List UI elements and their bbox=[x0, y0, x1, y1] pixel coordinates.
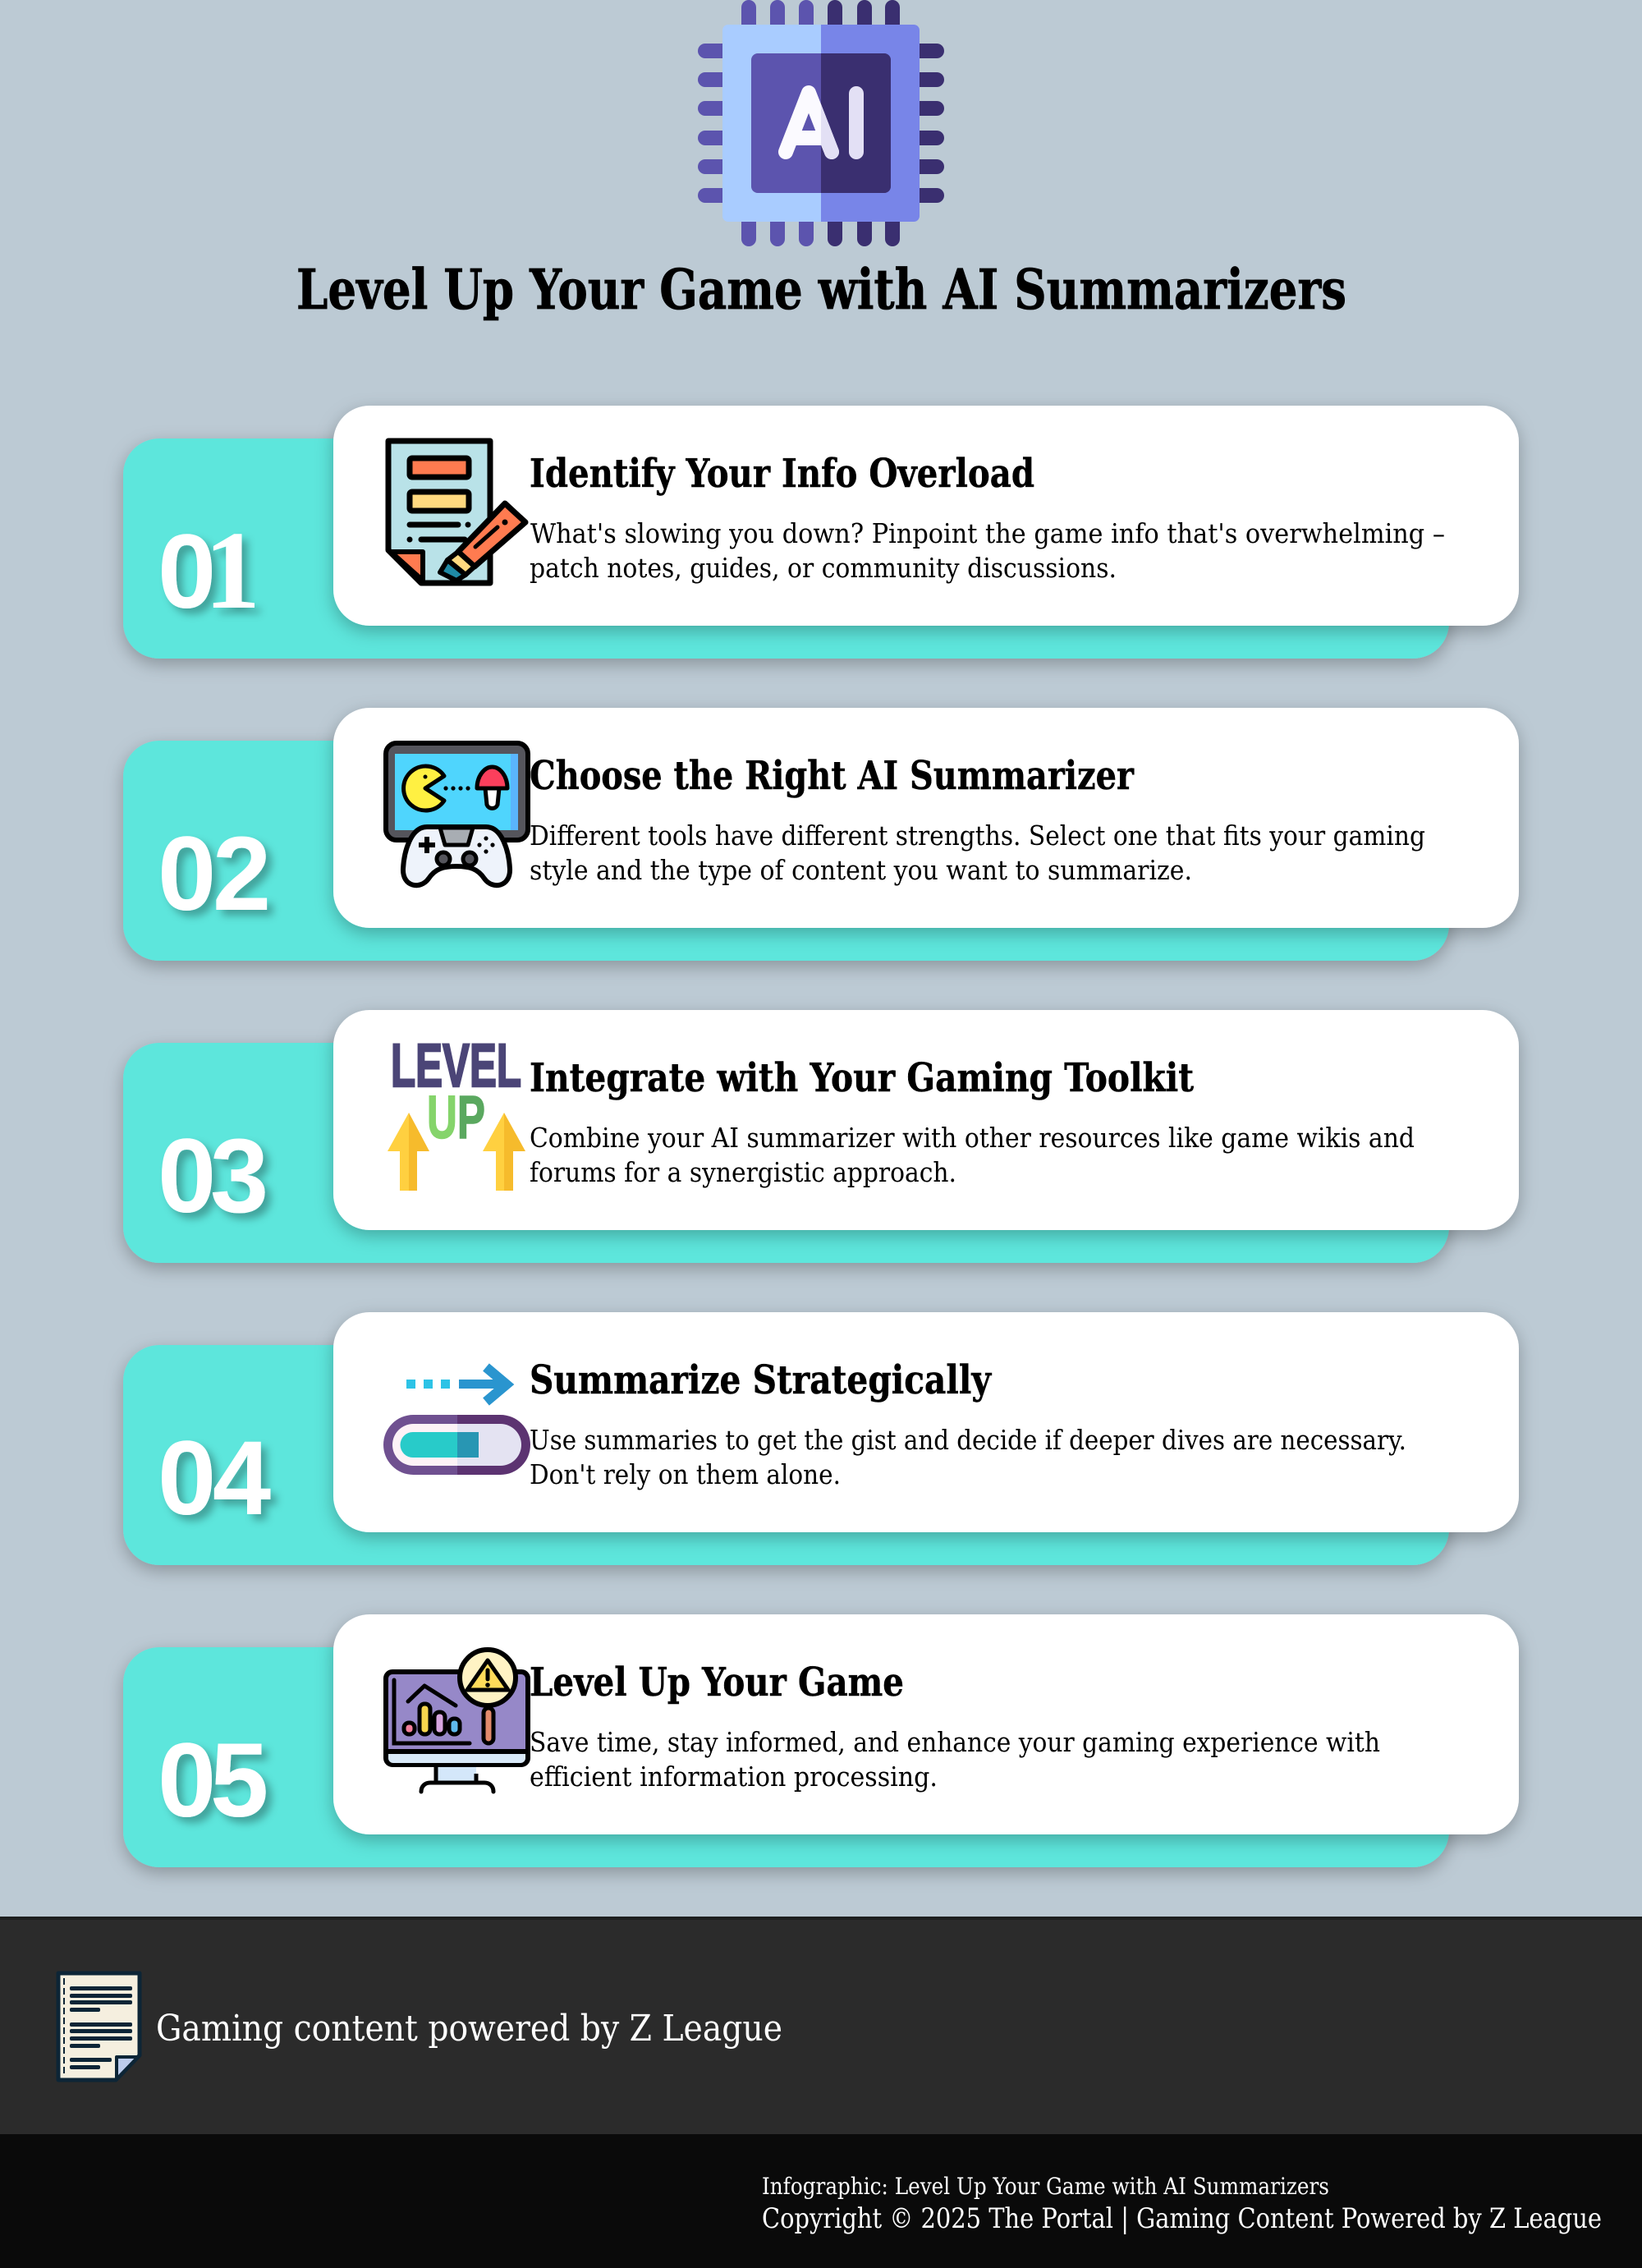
step body 05: Save time, stay informed, and enhance your gaming experience with bbox=[530, 1726, 1380, 1758]
icon: level up: UP bbox=[427, 1083, 485, 1151]
number 03: 0 bbox=[158, 1118, 216, 1235]
content card 02 bbox=[333, 708, 1519, 928]
panel: step 03 bbox=[123, 1010, 1519, 1263]
step body 04: Use summaries to get the gist and decide if deeper dives are necessary. bbox=[530, 1424, 1406, 1456]
step body 03: forums for a synergistic approach. bbox=[530, 1156, 956, 1188]
step heading 05: Level Up Your Game bbox=[530, 1660, 904, 1706]
icon: level up bbox=[388, 1031, 525, 1191]
icon: monitor chart with warning magnifier bbox=[386, 1650, 528, 1792]
number 04: 0 bbox=[158, 1420, 216, 1537]
icon: level up: LEVEL bbox=[391, 1031, 521, 1100]
step heading 02: Choose the Right AI Summarizer bbox=[530, 753, 1135, 799]
number tab 01 bbox=[123, 438, 1449, 659]
panel: step 04 bbox=[123, 1312, 1519, 1565]
number 01: 0 bbox=[158, 513, 216, 631]
number 05: 0 bbox=[158, 1722, 216, 1839]
panel: step 05 bbox=[123, 1614, 1519, 1867]
step heading 04: Summarize Strategically bbox=[530, 1357, 993, 1403]
icon: paper document bbox=[58, 1973, 140, 2080]
step body 05 bbox=[530, 1726, 1380, 1793]
icon: document and pencil bbox=[388, 441, 525, 583]
number tab 02 bbox=[123, 741, 1449, 961]
content card 01 bbox=[333, 406, 1519, 626]
infographic caption: Infographic: Level Up Your Game with AI Summarizers bbox=[762, 2173, 1329, 2200]
step body 01: What's slowing you down? Pinpoint the game info that's overwhelming – bbox=[530, 517, 1445, 549]
number 05: 5 bbox=[210, 1722, 268, 1839]
step body 05: efficient information processing. bbox=[530, 1761, 938, 1793]
number 01: 1 bbox=[204, 509, 260, 632]
number 04: 4 bbox=[213, 1420, 271, 1537]
panel: footer band bbox=[0, 1917, 1642, 2134]
icon: AI chip bbox=[698, 0, 944, 246]
step body 02: style and the type of content you want to summarize. bbox=[530, 854, 1192, 886]
step body 01: patch notes, guides, or community discussions. bbox=[530, 552, 1117, 584]
footer text: Gaming content powered by Z League bbox=[156, 2008, 782, 2050]
content card 04 bbox=[333, 1312, 1519, 1532]
number tab 03 bbox=[123, 1043, 1449, 1263]
panel: copyright band bbox=[0, 2134, 1642, 2268]
title: Level Up Your Game with AI Summarizers bbox=[296, 257, 1346, 322]
number tab 05 bbox=[123, 1647, 1449, 1867]
content card 03 bbox=[333, 1010, 1519, 1230]
step body 01 bbox=[530, 517, 1445, 584]
step body 03: Combine your AI summarizer with other resources like game wikis and bbox=[530, 1122, 1415, 1154]
number 03: 3 bbox=[210, 1118, 268, 1235]
icon: game screen and controller bbox=[386, 743, 528, 885]
number 02: 2 bbox=[213, 815, 271, 933]
step body 04 bbox=[530, 1424, 1406, 1490]
step body 02: Different tools have different strengths. Select one that fits your gaming bbox=[530, 820, 1425, 852]
content card 05 bbox=[333, 1614, 1519, 1834]
step body 03 bbox=[530, 1122, 1415, 1188]
step heading 01: Identify Your Info Overload bbox=[530, 451, 1034, 497]
step body 02 bbox=[530, 820, 1425, 886]
icon: progress bar with arrow bbox=[383, 1367, 530, 1475]
number 02: 0 bbox=[158, 815, 216, 933]
step body 04: Don't rely on them alone. bbox=[530, 1458, 841, 1490]
panel: step 02 bbox=[123, 708, 1519, 961]
number tab 04 bbox=[123, 1345, 1449, 1565]
step heading 03: Integrate with Your Gaming Toolkit bbox=[530, 1055, 1194, 1101]
panel: step 01 bbox=[123, 406, 1519, 659]
